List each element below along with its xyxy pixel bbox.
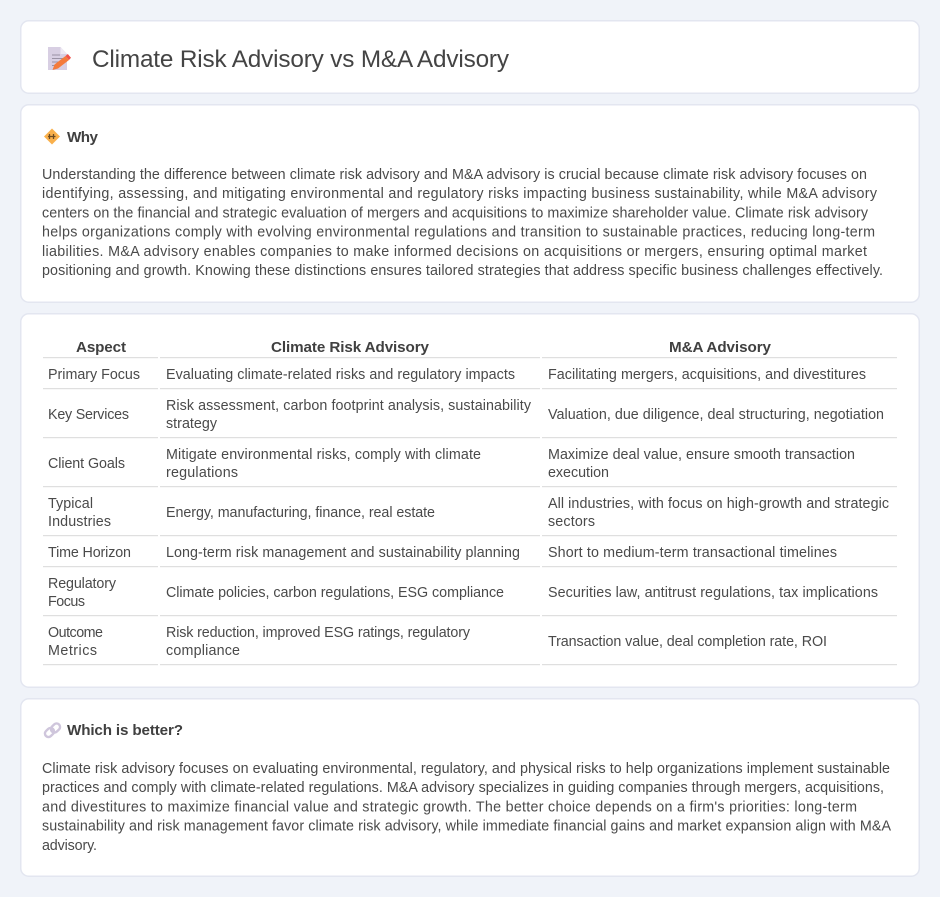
panel: header	[21, 21, 919, 93]
icon: link	[43, 722, 62, 739]
row: client goals	[48, 447, 855, 481]
row: time horizon	[48, 545, 837, 561]
text block: why	[42, 167, 883, 279]
row: primary focus: Evaluating climate-related risks and regulatory impacts	[166, 367, 515, 383]
row: key services	[48, 398, 884, 432]
row: key services: Risk assessment, carbon footprint analysis, sustainability	[166, 398, 532, 414]
row: primary focus: Primary Focus	[48, 367, 140, 383]
row: outcome metrics: Transaction value, deal completion rate, ROI	[548, 634, 827, 650]
row: regulatory focus: Regulatory	[48, 576, 117, 592]
row: outcome metrics: Outcome	[48, 625, 103, 641]
text block: why: liabilities. M&A advisory enables companies to make informed decisions on acquisitions or mergers, ensuring optimal market	[42, 244, 867, 260]
row: typical industries: Energy, manufacturing, finance, real estate	[166, 505, 435, 521]
row: outcome metrics: Risk reduction, improved ESG ratings, regulatory	[166, 625, 471, 641]
row: primary focus: Facilitating mergers, acquisitions, and divestitures	[548, 367, 866, 383]
panel: why	[21, 105, 919, 302]
row: outcome metrics: Metrics	[48, 643, 97, 659]
text block: which is better: sustainability and risk management favor climate risk advisory, while immediate financial gains and market expansion align with M&A	[42, 819, 891, 835]
row: regulatory focus	[48, 576, 878, 610]
heading: why: Why	[67, 129, 99, 146]
table header row: Climate Risk Advisory	[271, 339, 430, 356]
text block: why: centers on the financial and strategic evaluation of mergers and acquisitions to maximize shareholder value. Climate risk advisory	[42, 205, 869, 221]
row: typical industries: Industries	[48, 514, 111, 530]
row: time horizon: Long-term risk management and sustainability planning	[166, 545, 520, 561]
row: client goals: Maximize deal value, ensure smooth transaction	[548, 447, 855, 463]
row: time horizon: Short to medium-term transactional timelines	[548, 545, 837, 561]
row: client goals: execution	[548, 465, 609, 481]
row: typical industries: sectors	[548, 514, 595, 530]
text block: which is better: advisory.	[42, 838, 97, 854]
row: regulatory focus: Focus	[48, 594, 85, 610]
text block: why: helps organizations comply with evolving environmental regulations and transition to sustainable practices, reducing long-term	[42, 225, 875, 241]
text block: which is better	[42, 761, 891, 854]
row: primary focus	[48, 367, 866, 383]
panel: which is better	[21, 699, 919, 876]
row: key services: Key Services	[48, 407, 129, 423]
table header row: M&A Advisory	[669, 339, 772, 356]
text block: why: Understanding the difference between climate risk advisory and M&A advisory is crucial because climate risk advisory focuses on	[42, 167, 867, 183]
table header row	[76, 339, 772, 356]
row: time horizon: Time Horizon	[48, 545, 131, 561]
row: key services: Valuation, due diligence, deal structuring, negotiation	[548, 407, 884, 423]
text block: why: positioning and growth. Knowing these distinctions ensures tailored strategies that address specific business challenges effectively.	[42, 263, 883, 279]
row: client goals: Client Goals	[48, 456, 125, 472]
row: outcome metrics	[48, 625, 827, 659]
row: client goals: Mitigate environmental risks, comply with climate	[166, 447, 481, 463]
text block: which is better: practices and comply with climate-related regulations. M&A advisory specializes in guiding companies through mergers, acquisitions,	[42, 780, 884, 796]
row: key services: strategy	[166, 416, 218, 432]
row: regulatory focus: Climate policies, carbon regulations, ESG compliance	[166, 585, 504, 601]
text block: why: identifying, assessing, and mitigating environmental and regulatory risks impacting business sustainability, while M&A advisory	[42, 186, 878, 202]
row: typical industries	[48, 496, 889, 530]
text block: which is better: and divestitures to maximize financial value and strategic growth. The better choice depends on a firm's priorities: long-term	[42, 799, 857, 815]
row: outcome metrics: compliance	[166, 643, 240, 659]
title: Climate Risk Advisory vs M&A Advisory	[92, 46, 510, 73]
row: regulatory focus: Securities law, antitrust regulations, tax implications	[548, 585, 878, 601]
table header row: Aspect	[76, 339, 126, 356]
row: typical industries: All industries, with focus on high-growth and strategic	[548, 496, 889, 512]
icon: memo with pencil	[48, 47, 71, 70]
icon: warning diamond	[44, 128, 60, 144]
panel: comparison table	[21, 314, 919, 687]
heading: which is better: Which is better?	[67, 722, 183, 739]
row: typical industries: Typical	[48, 496, 93, 512]
text block: which is better: Climate risk advisory focuses on evaluating environmental, regulatory, and physical risks to help organizations implement sustainable	[42, 761, 890, 777]
row: client goals: regulations	[166, 465, 238, 481]
